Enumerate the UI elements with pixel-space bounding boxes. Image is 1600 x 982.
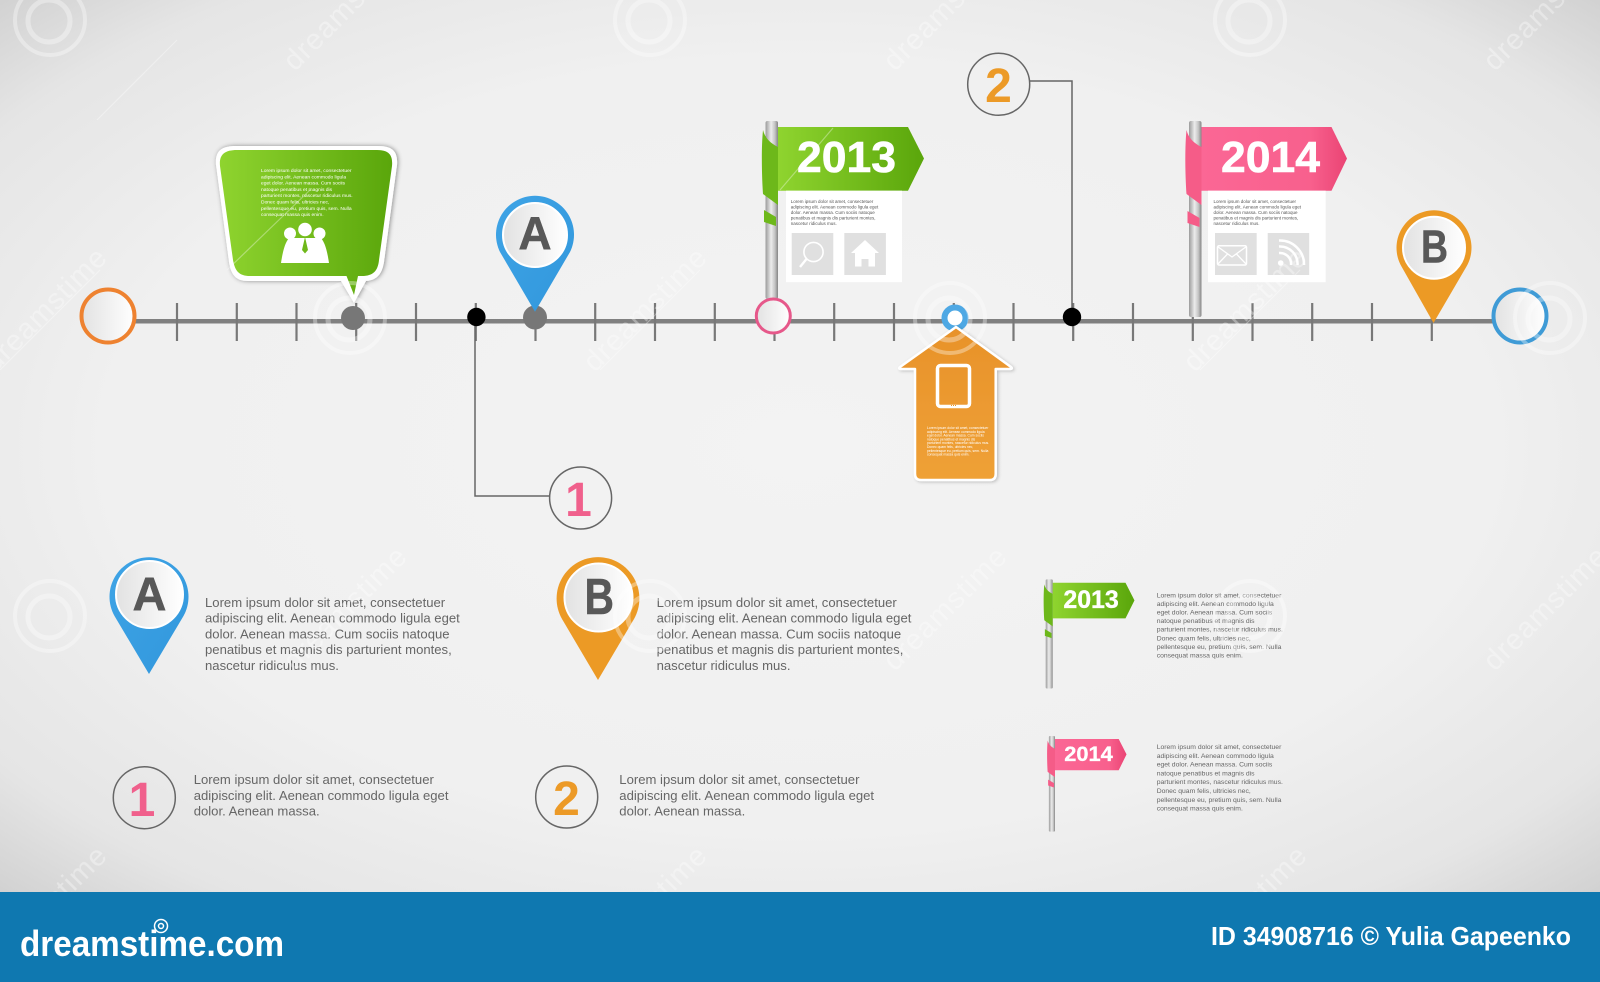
connector: marker 1 <box>467 308 550 496</box>
legend text B: Lorem ipsum dolor sit amet, consectetuer <box>657 595 897 610</box>
bubble text: pellentesque eu, pretium quis, sem. Nulla <box>261 206 352 212</box>
timeline end circle <box>1494 290 1546 342</box>
legend text 2: dolor. Aenean massa. <box>619 804 745 819</box>
arrow text: Donec quam felis, ultricies nec, <box>927 445 973 449</box>
card: penatibus et magnis dis parturient montes, <box>791 216 875 220</box>
gray marker dot under bubble <box>341 306 365 330</box>
legend: pin A <box>110 557 189 674</box>
legend: circle 1: 1 <box>129 774 155 827</box>
legend text 2014: consequat massa quis enim. <box>1157 806 1243 813</box>
arrow text: adipiscing elit. Aenean commodo ligula <box>927 430 985 434</box>
legend: pin B: B <box>584 568 614 625</box>
legend text 1: dolor. Aenean massa. <box>194 804 320 819</box>
legend text A: adipiscing elit. Aenean commodo ligula eget <box>205 611 460 626</box>
icon: logo spiral <box>154 920 168 932</box>
callout number 1: 1 <box>565 474 592 527</box>
pin B on timeline: B <box>1421 221 1448 273</box>
bubble text: adipiscing elit. Aenean commodo ligula <box>261 174 346 180</box>
legend text A: penatibus et magnis dis parturient montes, <box>205 642 452 657</box>
legend text A: nascetur ridiculus mus. <box>205 658 339 673</box>
panel: green speech bubble <box>216 146 397 303</box>
legend text 2013: consequat massa quis enim. <box>1157 652 1243 660</box>
icon: people <box>281 223 329 263</box>
bubble text: consequat massa quis enim. <box>261 212 324 218</box>
card <box>786 191 902 282</box>
year label: 2014 <box>1221 133 1321 182</box>
pin A on timeline <box>496 196 574 330</box>
arrow text: parturient montes, nascetur ridiculus mus. <box>927 441 989 445</box>
icon: rss <box>1268 233 1309 275</box>
card: Lorem ipsum dolor sit amet, consectetuer <box>791 199 874 204</box>
bubble text: parturient montes, nascetur ridiculus mus. <box>261 193 353 199</box>
card: nascetur ridiculus mus. <box>791 221 837 226</box>
blue ring node <box>944 308 966 328</box>
watermark overlay: dreamstime <box>277 540 414 677</box>
legend text 2014: Donec quam felis, ultricies nec, <box>1157 788 1251 795</box>
legend text 2013: parturient montes, nascetur ridiculus mus. <box>1157 627 1283 634</box>
legend text 1: adipiscing elit. Aenean commodo ligula eget <box>194 788 449 803</box>
legend text B: dolor. Aenean massa. Cum sociis natoque <box>657 626 901 641</box>
legend text B: penatibus et magnis dis parturient montes, <box>657 642 903 657</box>
flag banner <box>778 127 924 191</box>
icon: home <box>844 233 886 275</box>
timeline start circle <box>82 290 134 342</box>
legend text 2014: natoque penatibus et magnis dis <box>1157 770 1255 777</box>
year label: 2013 <box>797 133 896 182</box>
arrow text: eget dolor. Aenean massa. Cum sociis <box>927 434 984 438</box>
pole <box>766 121 778 299</box>
legend text 2014: pellentesque eu, pretium quis, sem. Nulla <box>1157 797 1282 804</box>
legend text 2013: Lorem ipsum dolor sit amet, consectetuer <box>1157 592 1282 599</box>
footer logo: dreamstime.com <box>20 923 284 964</box>
bubble text: Lorem ipsum dolor sit amet, consectetuer <box>261 168 352 174</box>
legend text 2013: pellentesque eu, pretium quis, sem. Nulla <box>1157 644 1282 651</box>
legend text B: adipiscing elit. Aenean commodo ligula eget <box>657 611 912 626</box>
card: dolor. Aenean massa. Cum sociis natoque <box>791 210 875 215</box>
watermark overlay: dreamstime <box>577 839 714 976</box>
flag 2014 with card <box>1185 121 1347 317</box>
pink timeline node <box>756 299 790 333</box>
watermark overlay: dreamstime <box>1177 241 1314 378</box>
connector: marker 2 <box>1030 81 1081 326</box>
card <box>1208 191 1326 282</box>
legend text 2014: Lorem ipsum dolor sit amet, consectetuer <box>1157 744 1282 751</box>
card: adipiscing elit. Aenean commodo ligula eget <box>791 204 879 210</box>
icon: tablet <box>938 366 970 406</box>
callout number 2: 2 <box>985 60 1012 113</box>
bubble text: Donec quam felis, ultricies nec, <box>261 200 329 206</box>
flag 2013 with card <box>762 121 924 299</box>
card: Lorem ipsum dolor sit amet, consectetuer <box>1214 199 1297 204</box>
pin B on timeline <box>1396 210 1471 323</box>
legend text 2013: natoque penatibus et magnis dis <box>1157 618 1255 625</box>
legend: pin A: A <box>133 568 166 621</box>
legend: circle 2: 2 <box>553 773 580 826</box>
card: dolor. Aenean massa. Cum sociis natoque <box>1214 210 1298 215</box>
legend: small flag 2014: 2014 <box>1064 741 1113 766</box>
arrow text: Lorem ipsum dolor sit amet, consectetuer <box>927 426 989 430</box>
arrow text: consequat massa quis enim. <box>927 453 969 457</box>
card: nascetur ridiculus mus. <box>1214 221 1260 226</box>
arrow text: natoque penatibus et magnis dis <box>927 437 975 441</box>
bubble text: natoque penatibus et magnis dis <box>261 187 333 193</box>
legend text 2014: eget dolor. Aenean massa. Cum sociis <box>1157 762 1273 769</box>
icon: search <box>792 233 833 275</box>
footer credit: ID 34908716 © Yulia Gapeenko <box>1211 921 1571 951</box>
callout number 1 <box>550 467 612 529</box>
pin A on timeline: A <box>518 207 552 259</box>
bubble text: eget dolor. Aenean massa. Cum sociis <box>261 181 346 187</box>
legend: pin B <box>557 557 639 680</box>
panel: orange arrow <box>899 327 1012 480</box>
legend: small flag 2013 <box>1044 579 1134 689</box>
timeline <box>132 303 1498 341</box>
legend text 2: Lorem ipsum dolor sit amet, consectetuer <box>619 772 860 787</box>
legend: small flag 2014 <box>1047 736 1127 832</box>
legend text 2014: parturient montes, nascetur ridiculus mus. <box>1157 779 1283 786</box>
legend: circle 2 <box>536 766 598 828</box>
legend text 2: adipiscing elit. Aenean commodo ligula eget <box>619 788 874 803</box>
footer bar <box>0 892 1600 982</box>
icon: mail <box>1215 233 1257 275</box>
pole <box>1189 121 1202 317</box>
legend text A: dolor. Aenean massa. Cum sociis natoque <box>205 626 450 641</box>
arrow text: pellentesque eu, pretium quis, sem. Nulla <box>927 449 988 453</box>
card: penatibus et magnis dis parturient montes, <box>1214 216 1298 220</box>
legend: small flag 2013: 2013 <box>1063 587 1119 614</box>
legend text A: Lorem ipsum dolor sit amet, consectetuer <box>205 595 446 610</box>
watermark overlay: dreamstime <box>577 241 714 378</box>
watermark overlay: dreamstime <box>877 540 1014 677</box>
legend text 2013: adipiscing elit. Aenean commodo ligula <box>1157 601 1274 608</box>
legend: circle 1 <box>113 767 175 829</box>
legend text 2013: Donec quam felis, ultricies nec, <box>1157 635 1251 642</box>
card: adipiscing elit. Aenean commodo ligula eget <box>1214 204 1302 210</box>
callout number 2 <box>968 53 1030 115</box>
watermark overlay: dreamstime <box>1177 839 1314 976</box>
legend text B: nascetur ridiculus mus. <box>657 658 791 673</box>
legend text 2014: adipiscing elit. Aenean commodo ligula <box>1157 753 1274 760</box>
legend text 1: Lorem ipsum dolor sit amet, consectetuer <box>194 772 434 787</box>
legend text 2013: eget dolor. Aenean massa. Cum sociis <box>1157 610 1273 616</box>
flag banner <box>1202 127 1347 191</box>
